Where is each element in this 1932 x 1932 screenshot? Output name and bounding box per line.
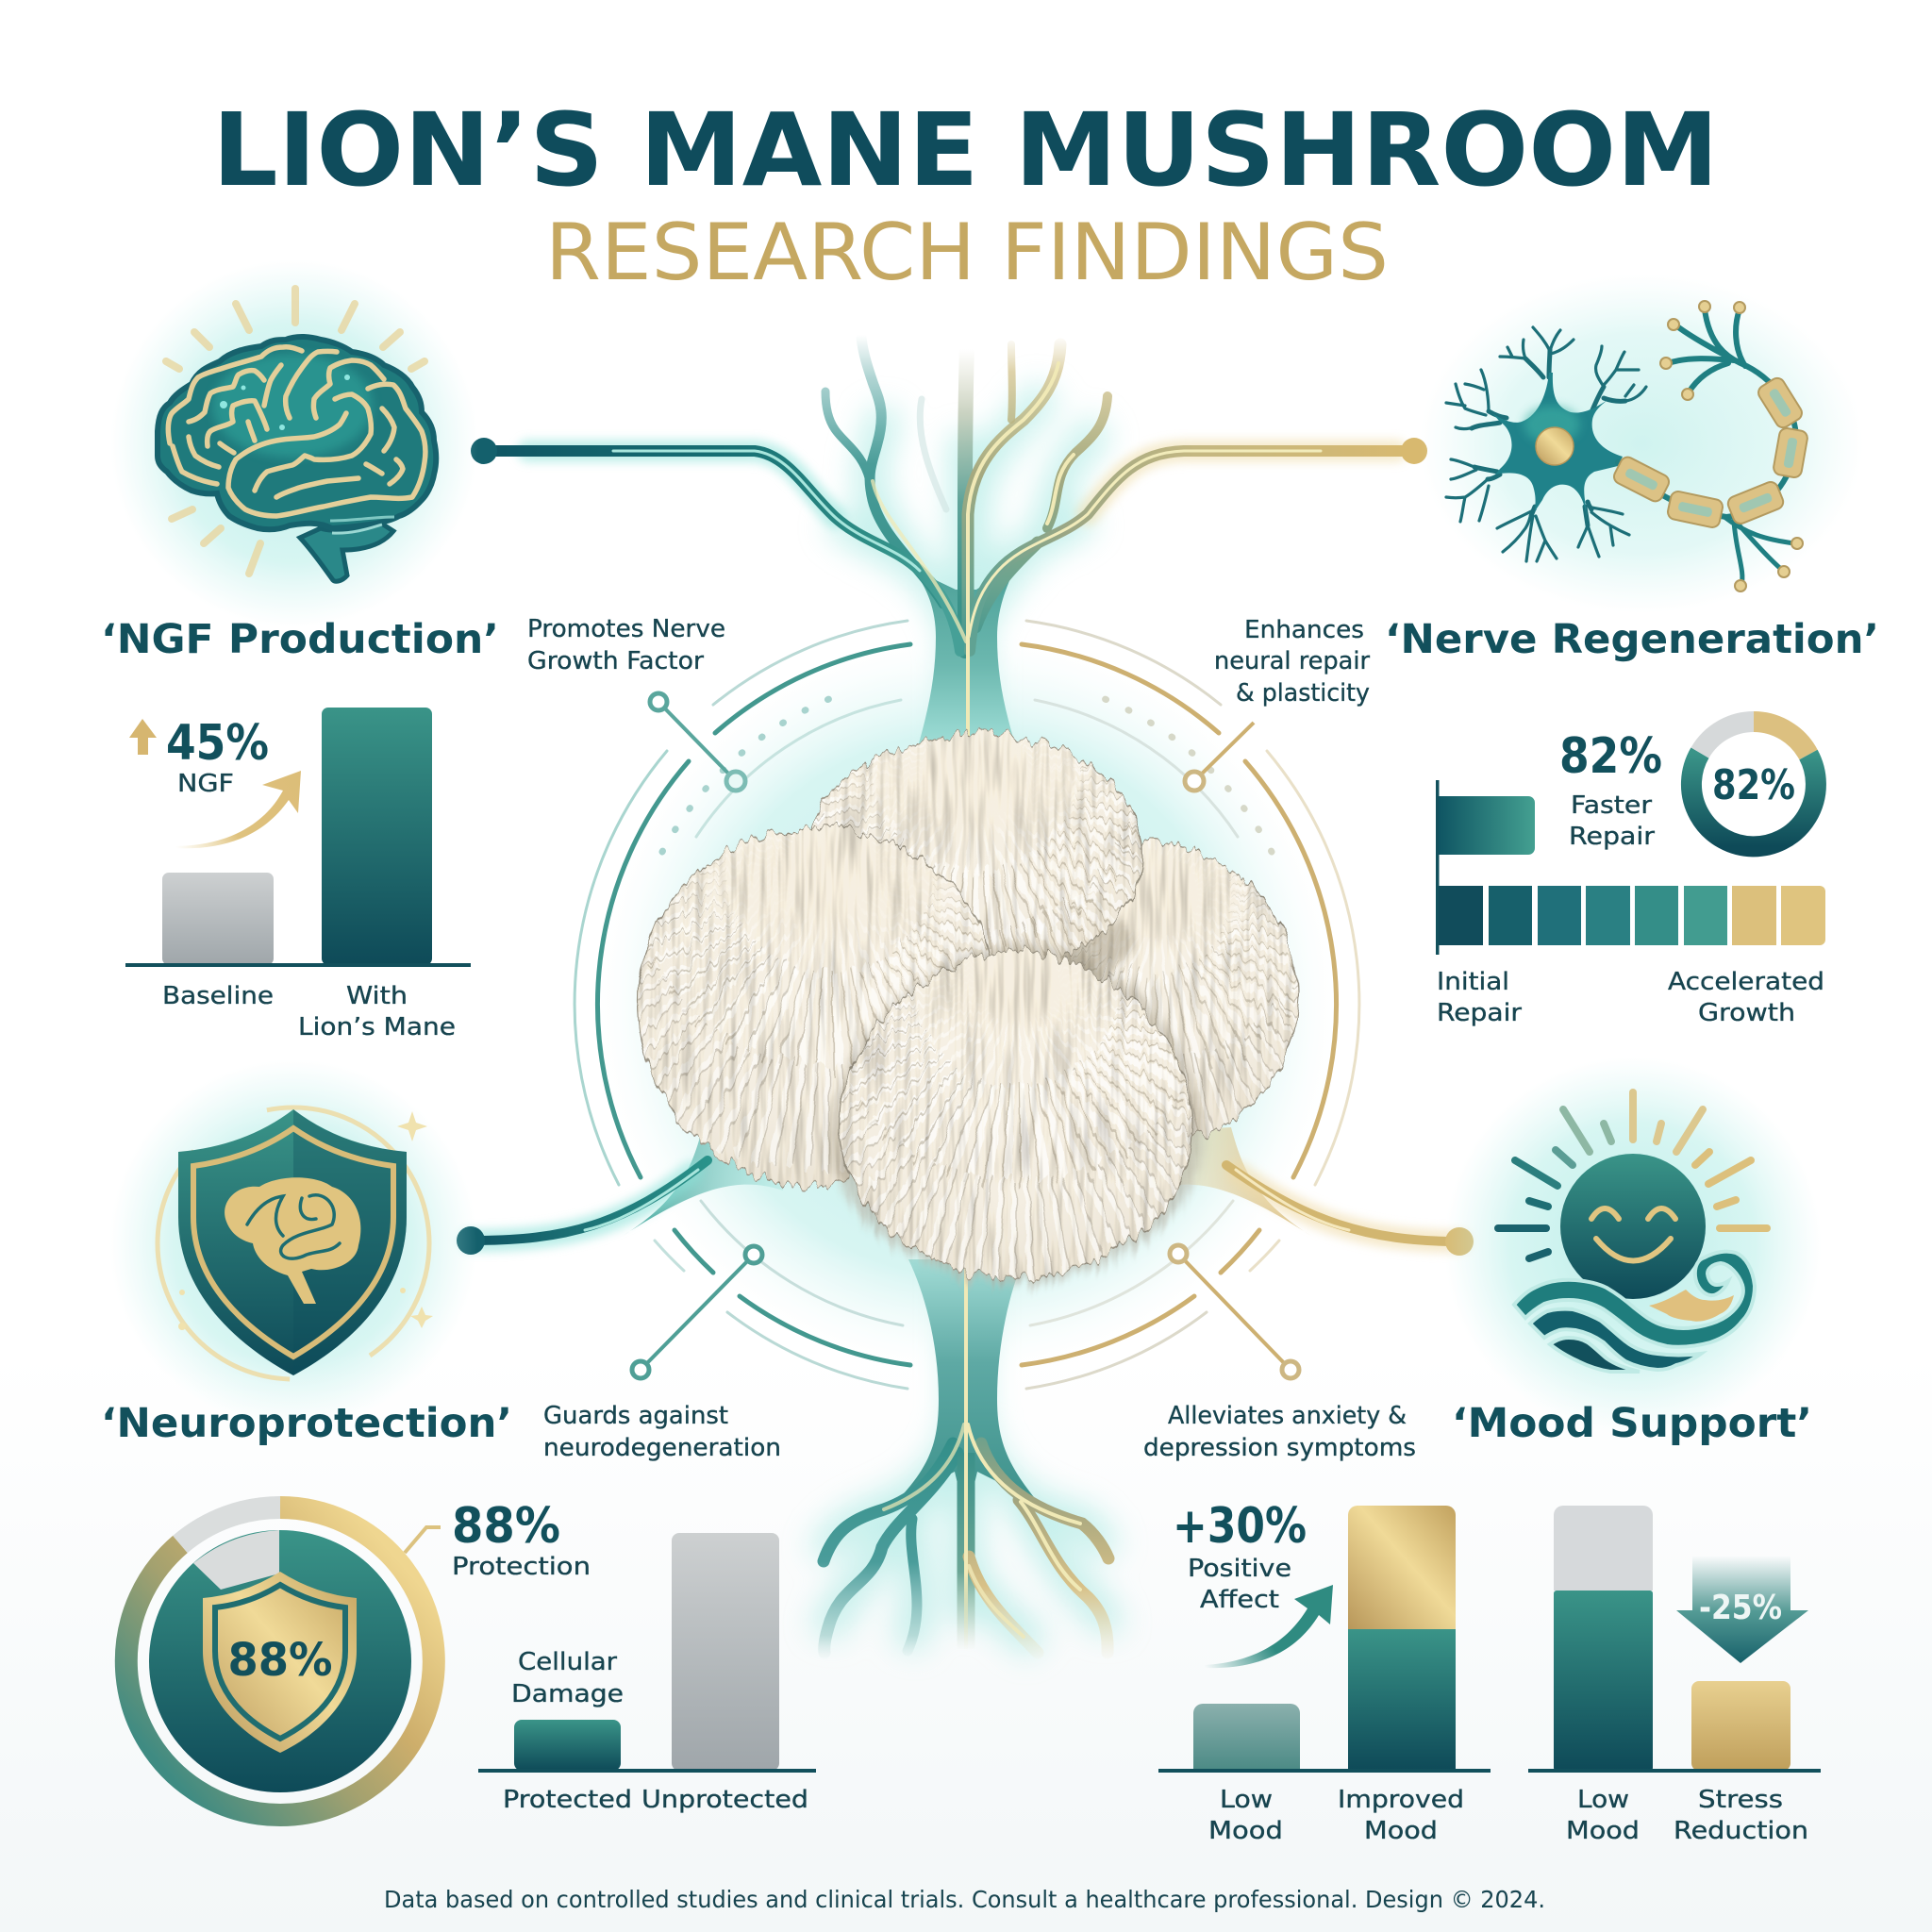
bar label: With bbox=[346, 982, 408, 1010]
bar label bbox=[1208, 1786, 1283, 1845]
description: Alleviates anxiety & bbox=[1168, 1402, 1407, 1430]
bar label: Lion’s Mane bbox=[298, 1013, 456, 1041]
icon: shield glow bbox=[109, 1059, 477, 1427]
bar label: Repair bbox=[1437, 999, 1522, 1027]
mushroom bbox=[636, 726, 1300, 1294]
stat: 82% faster repair bbox=[1559, 728, 1662, 851]
icon: brain glow bbox=[110, 259, 478, 627]
description bbox=[543, 1402, 781, 1462]
heading: ‘NGF Production’ bbox=[101, 616, 499, 663]
description: Guards against bbox=[543, 1402, 728, 1430]
heading: ‘Neuroprotection’ bbox=[101, 1400, 512, 1447]
bar label: Mood bbox=[1566, 1817, 1640, 1845]
stat: 88%: 88% bbox=[452, 1498, 560, 1555]
bar label: Initial bbox=[1437, 968, 1509, 996]
description: depression symptoms bbox=[1143, 1434, 1416, 1462]
description: neural repair bbox=[1214, 647, 1370, 675]
icon: gold swirl bbox=[1649, 1290, 1734, 1322]
description: Enhances bbox=[1244, 616, 1364, 644]
panel: Nerve Regeneration bbox=[1214, 274, 1879, 1027]
connector: Mood Support bbox=[1151, 1127, 1474, 1256]
icon: shield bbox=[178, 1109, 407, 1375]
bar label bbox=[1437, 968, 1522, 1027]
rings around mushroom: left bbox=[575, 621, 910, 1389]
lower roots bbox=[824, 1443, 1108, 1653]
heading: ‘Mood Support’ bbox=[1452, 1400, 1812, 1447]
arrow: gold growth bbox=[173, 771, 301, 848]
stat label: NGF bbox=[177, 770, 234, 798]
icon: gold shield bbox=[203, 1572, 357, 1753]
bar label bbox=[1338, 1786, 1464, 1845]
bar label: Mood bbox=[1364, 1817, 1438, 1845]
stat: +30%: +30% bbox=[1173, 1498, 1307, 1555]
bar label: Baseline bbox=[162, 982, 274, 1010]
icon: sun glow bbox=[1444, 1057, 1822, 1434]
bar label: Stress bbox=[1698, 1786, 1783, 1814]
stat: 82% faster repair: Faster bbox=[1571, 791, 1652, 820]
bar label bbox=[298, 982, 456, 1041]
panel: Mood Support bbox=[1143, 1057, 1822, 1845]
upper branches bbox=[825, 338, 1108, 651]
connector: Neuroprotection bbox=[457, 1127, 783, 1255]
panel: NGF Production bbox=[101, 259, 725, 1041]
connector: Nerve Regeneration bbox=[969, 438, 1427, 651]
trunk highlights bbox=[873, 363, 1074, 755]
donut chart: 82% bbox=[1712, 761, 1795, 809]
donut chart bbox=[1691, 722, 1816, 846]
icon: smiling sun bbox=[1498, 1092, 1767, 1372]
description: Promotes Nerve bbox=[527, 615, 725, 643]
bar chart: NGF bbox=[125, 708, 471, 1041]
arrow: -25%: -25% bbox=[1699, 1589, 1782, 1627]
arrow: teal growth bbox=[1205, 1585, 1333, 1668]
title: LION’S MANE MUSHROOM bbox=[212, 92, 1719, 209]
description bbox=[1143, 1402, 1416, 1462]
lobe: front bbox=[824, 935, 1207, 1294]
stat: +30%: Positive bbox=[1188, 1555, 1291, 1583]
upper trunk bbox=[912, 561, 1019, 750]
icon: brain bbox=[158, 337, 436, 581]
stat: +30%: Affect bbox=[1200, 1586, 1279, 1614]
root highlights bbox=[884, 1269, 1080, 1651]
gauge: 88% protection bbox=[126, 1507, 441, 1815]
footer note: Data based on controlled studies and clinical trials. Consult a healthcare professional. Design © 2024. bbox=[384, 1886, 1545, 1913]
lobe: left bbox=[636, 822, 991, 1192]
lobe: top bbox=[811, 726, 1143, 981]
bar label: Protected bbox=[503, 1786, 632, 1814]
rings around mushroom: right bbox=[1022, 621, 1359, 1389]
bar label: Mood bbox=[1208, 1817, 1283, 1845]
bar chart: stress reduction bbox=[1528, 1506, 1821, 1845]
description: Growth Factor bbox=[527, 647, 704, 675]
leader line bbox=[405, 1527, 441, 1553]
stat: 88%: Protection bbox=[452, 1553, 591, 1581]
callout nodes bbox=[632, 693, 1299, 1378]
chart label: Damage bbox=[511, 1680, 624, 1708]
progress bars bbox=[1436, 780, 1825, 1027]
chart label: Cellular bbox=[518, 1648, 617, 1676]
bar label bbox=[1674, 1786, 1808, 1845]
lobe: right bbox=[1062, 837, 1300, 1140]
bar label: Growth bbox=[1698, 999, 1795, 1027]
description: & plasticity bbox=[1236, 679, 1370, 708]
stat: 88% bbox=[452, 1498, 591, 1581]
description bbox=[1214, 616, 1370, 708]
bar label: Low bbox=[1220, 1786, 1273, 1814]
bar label: Improved bbox=[1338, 1786, 1464, 1814]
stat: +30% bbox=[1173, 1498, 1307, 1614]
stat: 45%: 45% bbox=[166, 715, 269, 772]
sparkles bbox=[178, 1111, 433, 1330]
icon: brain rays bbox=[166, 289, 425, 574]
icon: gold shield: 88% bbox=[228, 1634, 332, 1687]
lower trunk bbox=[896, 1259, 1038, 1519]
description bbox=[527, 615, 725, 675]
panel: Neuroprotection bbox=[101, 1059, 816, 1815]
bar label bbox=[1566, 1786, 1640, 1845]
icon: gold ring bbox=[158, 1108, 429, 1379]
subtitle: RESEARCH FINDINGS bbox=[545, 207, 1389, 298]
bar label bbox=[1668, 968, 1824, 1027]
icon: neuron glow bbox=[1420, 274, 1863, 613]
stat: 82% faster repair: Repair bbox=[1569, 823, 1655, 851]
bar chart: positive affect bbox=[1158, 1498, 1491, 1845]
bar label: Low bbox=[1577, 1786, 1629, 1814]
icon: gold brain bbox=[225, 1177, 360, 1304]
chart label bbox=[511, 1648, 624, 1708]
description: neurodegeneration bbox=[543, 1434, 781, 1462]
icon: neuron bbox=[1446, 301, 1808, 591]
bar chart: cellular damage bbox=[478, 1533, 816, 1814]
central neural tree and mushroom bbox=[457, 338, 1474, 1653]
heading: ‘Nerve Regeneration’ bbox=[1385, 616, 1879, 663]
bar label: Unprotected bbox=[641, 1786, 808, 1814]
connector: NGF bbox=[471, 438, 960, 651]
stat: 82% faster repair: 82% bbox=[1559, 728, 1662, 785]
icon: waves bbox=[1514, 1252, 1755, 1372]
icon: up arrow bbox=[129, 719, 157, 755]
arrow: -25% bbox=[1676, 1556, 1808, 1663]
bar label: Reduction bbox=[1674, 1817, 1808, 1845]
bar label: Accelerated bbox=[1668, 968, 1824, 996]
